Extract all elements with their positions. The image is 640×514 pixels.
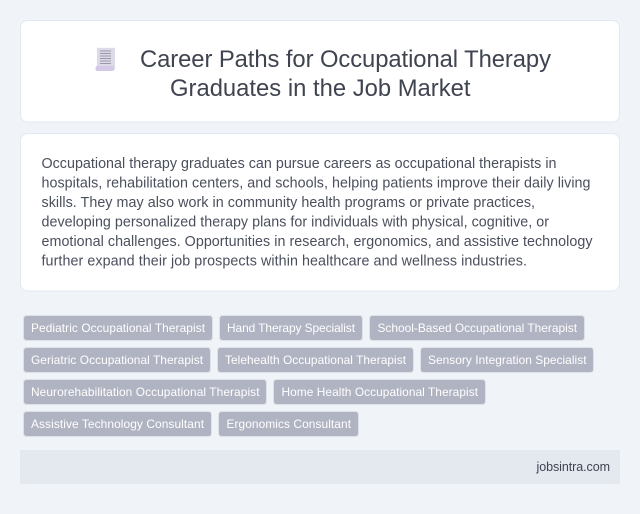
tag: Home Health Occupational Therapist: Home Health Occupational Therapist bbox=[282, 385, 479, 399]
text block: description: developing personalized therapy plans for individuals with physical, cognitive, or bbox=[42, 214, 549, 230]
tag: Assistive Technology Consultant: Assistive Technology Consultant bbox=[31, 417, 205, 431]
title: Graduates in the Job Market bbox=[170, 75, 471, 102]
footer source text: jobsintra.com bbox=[536, 460, 610, 474]
tag: Telehealth Occupational Therapist: Telehealth Occupational Therapist bbox=[225, 353, 407, 367]
text block: description: skills. They may also work in community health programs or private practices, bbox=[42, 195, 535, 211]
title: Career Paths for Occupational Therapy bbox=[140, 46, 551, 73]
tag: Pediatric Occupational Therapist: Pediatric Occupational Therapist bbox=[31, 321, 206, 335]
tag list: job titles bbox=[24, 316, 594, 436]
tag: Telehealth Occupational Therapist bbox=[218, 348, 414, 372]
icon: paper scroll bbox=[96, 48, 115, 71]
tag: Ergonomics Consultant bbox=[218, 412, 358, 436]
tag: Geriatric Occupational Therapist bbox=[24, 348, 210, 372]
tag: Hand Therapy Specialist bbox=[220, 316, 362, 340]
tag: Neurorehabilitation Occupational Therapist: Neurorehabilitation Occupational Therapist bbox=[31, 385, 260, 399]
tag: Pediatric Occupational Therapist bbox=[24, 316, 212, 340]
tag: School-Based Occupational Therapist bbox=[370, 316, 584, 340]
tag: Home Health Occupational Therapist bbox=[274, 380, 486, 404]
tag: Sensory Integration Specialist: Sensory Integration Specialist bbox=[428, 353, 587, 367]
tag: Sensory Integration Specialist bbox=[420, 348, 594, 372]
tag: Ergonomics Consultant: Ergonomics Consultant bbox=[226, 417, 352, 431]
panel: header card bbox=[20, 20, 620, 122]
tag: School-Based Occupational Therapist: School-Based Occupational Therapist bbox=[378, 321, 578, 335]
tag: Geriatric Occupational Therapist: Geriatric Occupational Therapist bbox=[31, 353, 204, 367]
panel: description card bbox=[20, 134, 620, 291]
text block: description: emotional challenges. Opportunities in research, ergonomics, and assistive technology bbox=[42, 234, 593, 250]
footer bar bbox=[20, 450, 620, 484]
text block: description: further expand their job prospects within healthcare and wellness industries. bbox=[42, 254, 527, 270]
tag: Assistive Technology Consultant bbox=[24, 412, 212, 436]
text block: description: Occupational therapy graduates can pursue careers as occupational therapists in bbox=[42, 156, 557, 172]
text block: description: hospitals, rehabilitation centers, and schools, helping patients improve their daily living bbox=[42, 176, 591, 192]
tag: Hand Therapy Specialist: Hand Therapy Specialist bbox=[227, 321, 356, 335]
tag: Neurorehabilitation Occupational Therapist bbox=[24, 380, 266, 404]
